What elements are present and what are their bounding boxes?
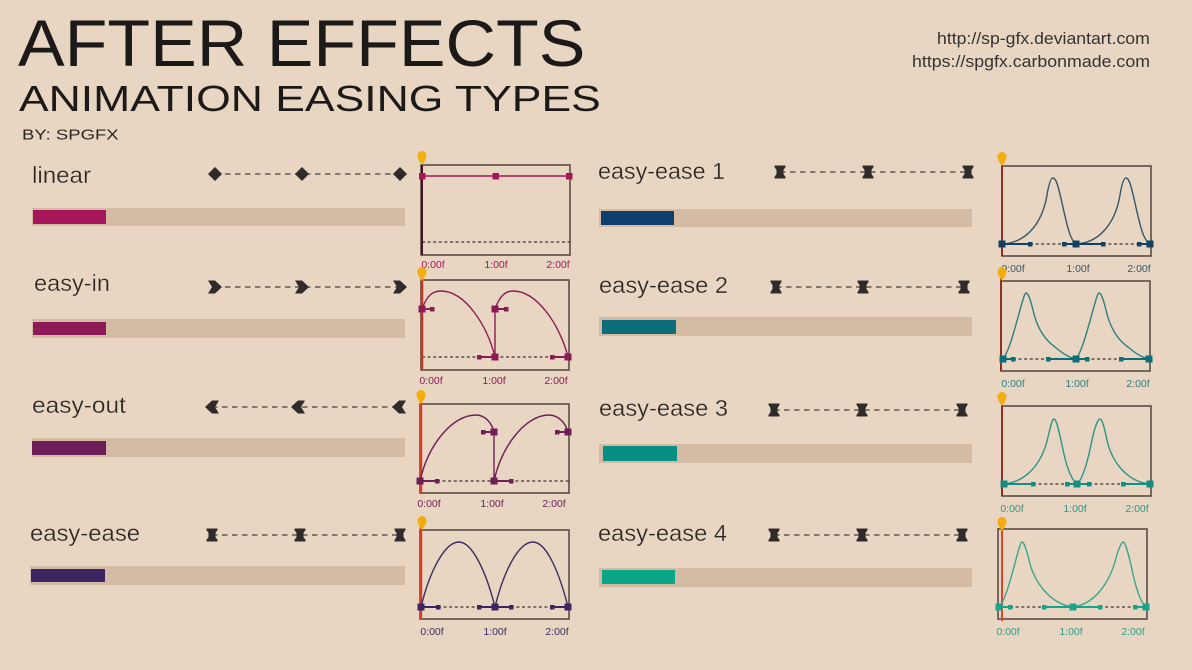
panel: easy-ease <box>30 516 572 638</box>
panel: easy-in <box>32 267 572 387</box>
graph: easy-in: 2:00f <box>544 375 568 387</box>
graph: easy-out: 2:00f <box>542 498 566 510</box>
label: easy-ease 1: easy-ease 1 <box>598 158 725 184</box>
keyframe timeline: easy-ease 4 <box>768 528 968 542</box>
keyframe timeline: easy-ease 2 <box>770 280 970 294</box>
graph: easy-ease 1: 0:00f <box>1001 263 1025 275</box>
panel: easy-out <box>32 390 572 510</box>
panel: easy-ease 1 <box>598 152 1154 275</box>
graph: easy-ease 2 <box>998 267 1152 390</box>
link: carbonmade: https://spgfx.carbonmade.com <box>912 53 1150 71</box>
graph: easy-ease 4: 0:00f <box>996 626 1020 638</box>
keyframe timeline: easy-ease 1 <box>774 166 974 178</box>
graph: easy-ease: 1:00f <box>483 626 507 638</box>
byline: BY: SPGFX <box>22 126 119 143</box>
graph: linear: 0:00f <box>421 259 445 271</box>
graph: easy-ease: 0:00f <box>420 626 444 638</box>
graph: easy-out: 0:00f <box>417 498 441 510</box>
label: linear: linear <box>32 162 91 188</box>
graph: easy-ease <box>418 516 572 638</box>
graph: linear <box>418 151 572 271</box>
panel: easy-ease 3 <box>599 392 1154 515</box>
graph: easy-in: 1:00f <box>482 375 506 387</box>
graph: easy-ease 3: 0:00f <box>1000 503 1024 515</box>
progress bar: easy-in <box>32 319 405 338</box>
keyframe timeline: easy-out <box>205 400 406 414</box>
link: deviantart: http://sp-gfx.deviantart.com <box>937 30 1150 48</box>
graph: easy-out: 1:00f <box>480 498 504 510</box>
progress bar: easy-ease 2 <box>599 317 972 336</box>
label: easy-in: easy-in <box>34 270 110 296</box>
progress bar: easy-ease 4 <box>599 568 972 587</box>
graph: easy-ease 3: 1:00f <box>1063 503 1087 515</box>
subtitle: ANIMATION EASING TYPES <box>19 78 601 119</box>
panel: easy-ease 2 <box>599 267 1152 390</box>
label: easy-ease 3: easy-ease 3 <box>599 395 728 421</box>
title: AFTER EFFECTS <box>18 7 585 81</box>
graph: easy-ease 2: 2:00f <box>1126 378 1150 390</box>
graph: linear: 2:00f <box>546 259 570 271</box>
keyframe timeline: easy-in <box>208 280 407 294</box>
graph: easy-ease 4: 1:00f <box>1059 626 1083 638</box>
keyframe timeline: easy-ease <box>206 528 406 542</box>
graph: easy-ease 3 <box>998 392 1154 515</box>
graph: easy-ease 2: 1:00f <box>1065 378 1089 390</box>
graph: linear: 1:00f <box>484 259 508 271</box>
label: easy-ease 4: easy-ease 4 <box>598 520 727 546</box>
label: easy-out: easy-out <box>32 392 127 418</box>
label: easy-ease 2: easy-ease 2 <box>599 272 728 298</box>
graph: easy-ease: 2:00f <box>545 626 569 638</box>
graph: easy-ease 1: 2:00f <box>1127 263 1151 275</box>
progress bar: easy-ease 3 <box>599 444 972 463</box>
graph: easy-ease 4 <box>996 517 1150 638</box>
progress bar: linear <box>32 208 405 226</box>
graph: easy-ease 2: 0:00f <box>1001 378 1025 390</box>
graph: easy-ease 4: 2:00f <box>1121 626 1145 638</box>
progress bar: easy-out <box>32 438 405 457</box>
progress bar: easy-ease 1 <box>599 209 972 227</box>
graph: easy-ease 1: 1:00f <box>1066 263 1090 275</box>
graph: easy-out <box>416 390 572 510</box>
panel: linear <box>32 151 572 271</box>
progress bar: easy-ease <box>30 566 405 585</box>
panel: easy-ease 4 <box>598 517 1150 638</box>
keyframe timeline: easy-ease 3 <box>768 404 968 416</box>
graph: easy-in <box>418 267 572 387</box>
graph: easy-ease 1 <box>998 152 1154 275</box>
graph: easy-in: 0:00f <box>419 375 443 387</box>
graph: easy-ease 3: 2:00f <box>1125 503 1149 515</box>
label: easy-ease: easy-ease <box>30 520 140 546</box>
keyframe timeline: linear <box>208 167 407 181</box>
